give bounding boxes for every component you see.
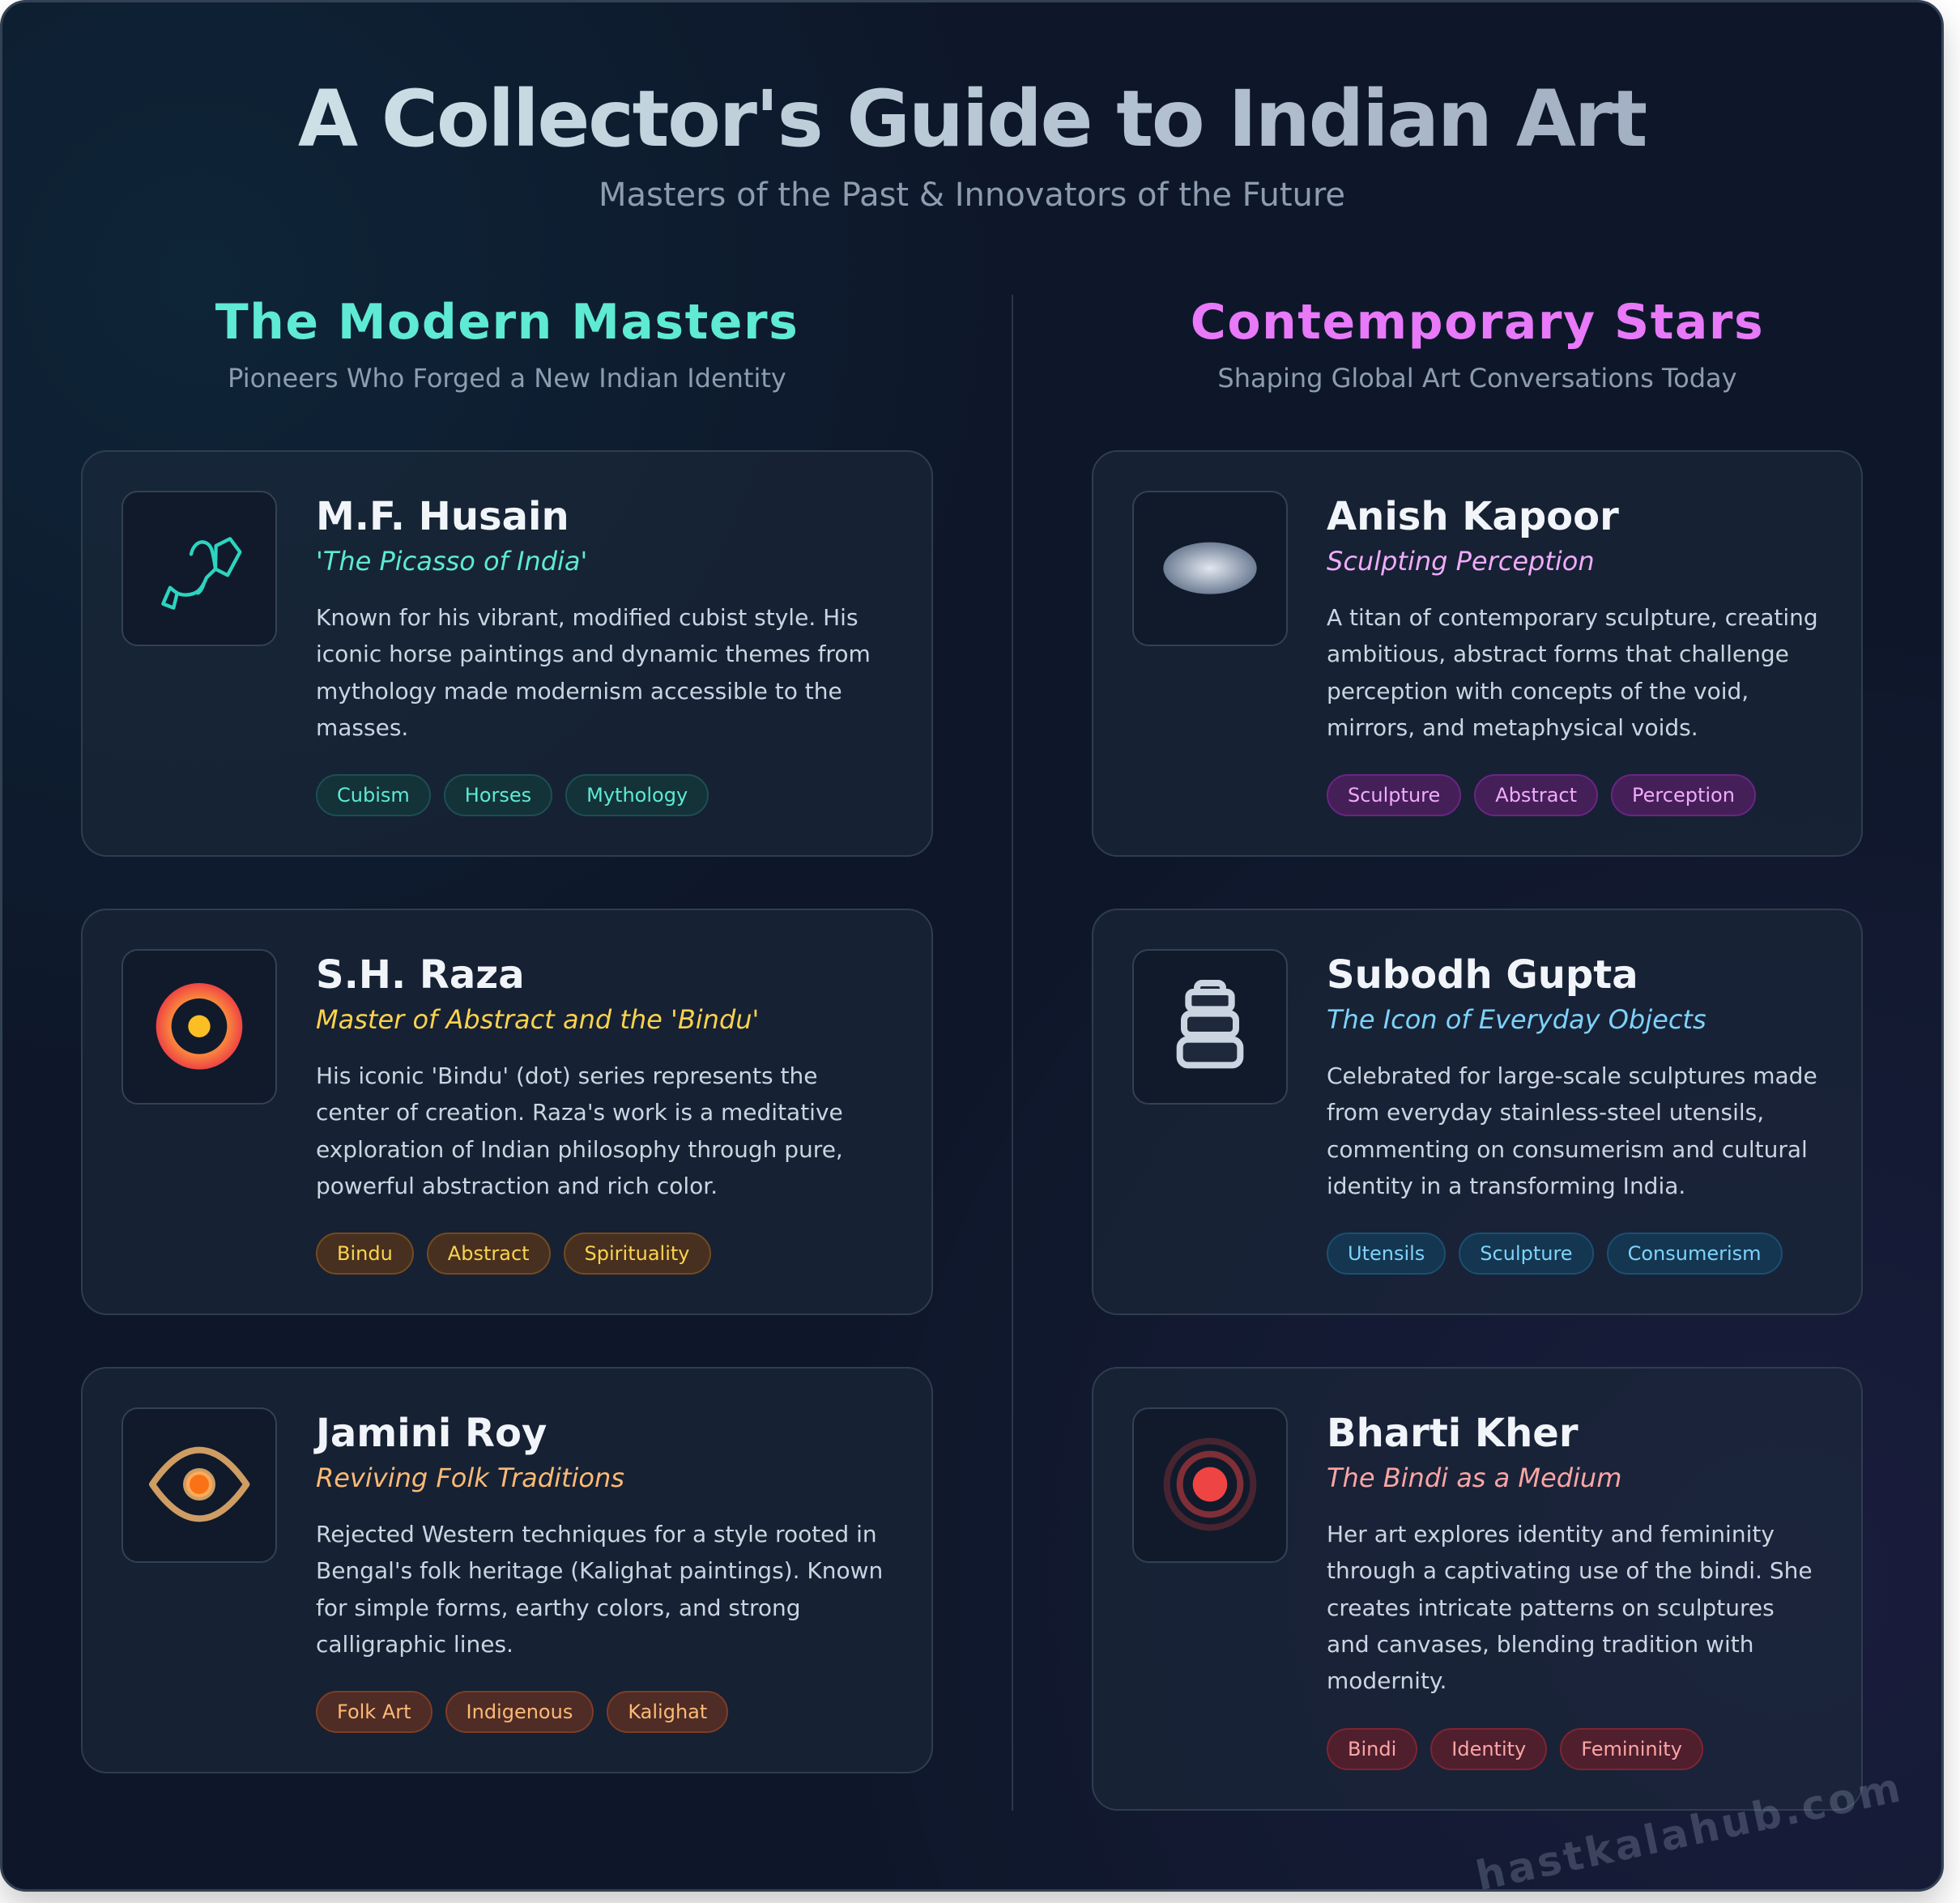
description: center of creation. Raza's work is a meditative xyxy=(316,1099,843,1126)
icon: folk eye xyxy=(121,1407,277,1563)
tags: Cubism xyxy=(337,784,410,807)
tags: Identity xyxy=(1451,1738,1526,1760)
description: exploration of Indian philosophy through pure, xyxy=(316,1135,843,1163)
tags: Abstract xyxy=(448,1242,530,1265)
description xyxy=(316,1521,883,1658)
description: through a captivating use of the bindi. She xyxy=(1327,1557,1813,1584)
tags: Kalighat xyxy=(628,1701,707,1723)
artist name: Bharti Kher xyxy=(1327,1411,1579,1456)
tags xyxy=(1327,774,1756,816)
description: A titan of contemporary sculpture, creating xyxy=(1327,604,1818,631)
artist name: Subodh Gupta xyxy=(1327,952,1638,998)
icon: horse line drawing xyxy=(121,491,277,646)
panel: Jamini Roy xyxy=(81,1367,933,1773)
description: calligraphic lines. xyxy=(316,1631,513,1658)
tags xyxy=(316,1691,728,1733)
description: Her art explores identity and femininity xyxy=(1327,1521,1775,1548)
subtitle: Masters of the Past & Innovators of the Future xyxy=(599,177,1345,214)
tags: Bindi xyxy=(1348,1738,1396,1760)
tags: Indigenous xyxy=(467,1701,573,1723)
icon: concentric bindi xyxy=(1132,1407,1288,1563)
tags xyxy=(316,774,709,816)
description xyxy=(316,604,871,741)
tags: Sculpture xyxy=(1348,784,1440,807)
icon: bindu xyxy=(121,949,277,1105)
description: masses. xyxy=(316,714,408,741)
description: His iconic 'Bindu' (dot) series represents the xyxy=(316,1062,817,1089)
tags xyxy=(316,1232,711,1275)
subheading: contemporary stars: Shaping Global Art Conversations Today xyxy=(1217,363,1737,394)
description xyxy=(316,1062,843,1199)
artist tagline: Reviving Folk Traditions xyxy=(316,1462,624,1493)
tags: Consumerism xyxy=(1628,1242,1762,1265)
subheading: modern masters: Pioneers Who Forged a New Indian Identity xyxy=(228,363,786,394)
panel: Subodh Gupta xyxy=(1092,909,1863,1315)
title: A Collector's Guide to Indian Art xyxy=(298,74,1646,164)
panel: M.F. Husain xyxy=(81,450,933,857)
description xyxy=(1327,1521,1813,1694)
description: modernity. xyxy=(1327,1667,1447,1694)
tags: Sculpture xyxy=(1480,1242,1573,1265)
artist tagline: 'The Picasso of India' xyxy=(316,546,587,577)
description: powerful abstraction and rich color. xyxy=(316,1173,718,1199)
description xyxy=(1327,604,1818,741)
description: commenting on consumerism and cultural xyxy=(1327,1135,1808,1163)
description: identity in a transforming India. xyxy=(1327,1173,1685,1199)
tags: Mythology xyxy=(586,784,688,807)
heading: contemporary stars: Contemporary Stars xyxy=(1191,294,1764,351)
description: creates intricate patterns on sculptures xyxy=(1327,1594,1775,1621)
description: from everyday stainless-steel utensils, xyxy=(1327,1099,1764,1126)
description xyxy=(1327,1062,1817,1199)
icon: stacked utensils xyxy=(1132,949,1288,1105)
tags: Folk Art xyxy=(337,1701,411,1723)
description: mythology made modernism accessible to the xyxy=(316,677,842,705)
artist tagline: Master of Abstract and the 'Bindu' xyxy=(316,1004,759,1035)
tags: Spirituality xyxy=(585,1242,690,1265)
description: perception with concepts of the void, xyxy=(1327,677,1749,705)
tags: Perception xyxy=(1632,784,1735,807)
artist tagline: The Bindi as a Medium xyxy=(1327,1462,1621,1493)
artist name: Jamini Roy xyxy=(316,1411,547,1456)
tags xyxy=(1327,1232,1783,1275)
tags xyxy=(1327,1728,1703,1770)
panel: S.H. Raza xyxy=(81,909,933,1315)
description: mirrors, and metaphysical voids. xyxy=(1327,714,1698,741)
artist name: M.F. Husain xyxy=(316,494,569,539)
heading: modern masters: The Modern Masters xyxy=(215,294,799,351)
artist name: S.H. Raza xyxy=(316,952,525,998)
description: Bengal's folk heritage (Kalighat paintings). Known xyxy=(316,1557,883,1584)
artist tagline: Sculpting Perception xyxy=(1327,546,1595,577)
tags: Bindu xyxy=(337,1242,393,1265)
tags: Horses xyxy=(465,784,531,807)
tags: Abstract xyxy=(1495,784,1577,807)
description: for simple forms, earthy colors, and strong xyxy=(316,1594,801,1621)
icon: void ellipse xyxy=(1132,491,1288,646)
artist tagline: The Icon of Everyday Objects xyxy=(1327,1004,1706,1035)
artist name: Anish Kapoor xyxy=(1327,494,1619,539)
description: iconic horse paintings and dynamic themes from xyxy=(316,641,871,667)
description: Known for his vibrant, modified cubist style. His xyxy=(316,604,859,631)
description: ambitious, abstract forms that challenge xyxy=(1327,641,1789,667)
description: Rejected Western techniques for a style rooted in xyxy=(316,1521,877,1548)
tags: Femininity xyxy=(1581,1738,1682,1760)
panel: Anish Kapoor xyxy=(1092,450,1863,857)
description: and canvases, blending tradition with xyxy=(1327,1631,1753,1658)
description: Celebrated for large-scale sculptures made xyxy=(1327,1062,1817,1089)
tags: Utensils xyxy=(1348,1242,1425,1265)
panel: Bharti Kher xyxy=(1092,1367,1863,1811)
